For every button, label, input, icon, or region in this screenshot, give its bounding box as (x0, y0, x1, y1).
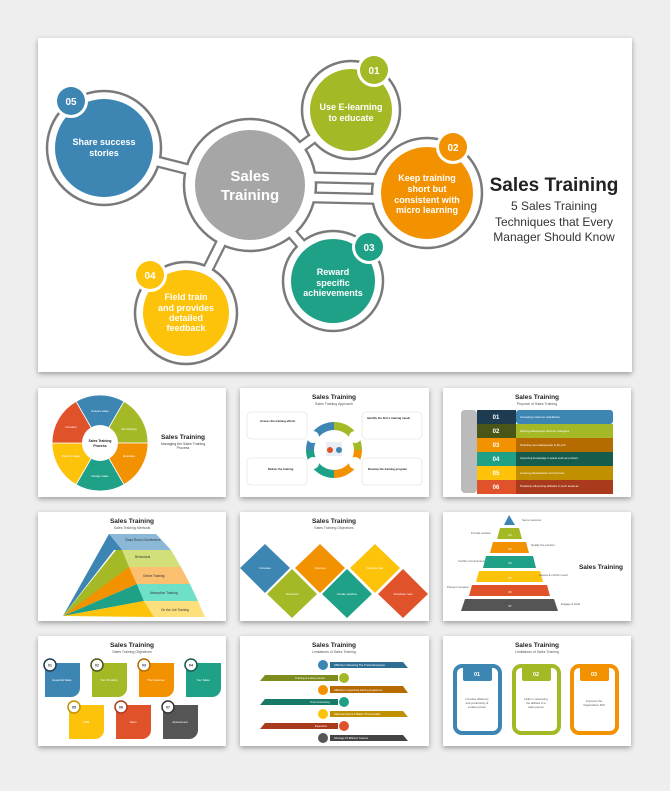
thumb 6: stacked pyramid (443, 512, 631, 621)
center hub: Training (221, 187, 279, 204)
thumb 7: objective cards (38, 636, 226, 746)
thumb 2: approach ring (240, 388, 429, 497)
thumb 9: three frames (443, 636, 631, 746)
thumb 2: approach ring: Deliver the training (268, 467, 294, 471)
center hub (195, 130, 305, 240)
thumb 9: three frames: the abilities of a (526, 701, 546, 705)
thumb 7: objective cards: 03 (142, 664, 146, 668)
title block: 5 Sales Training (511, 199, 597, 213)
title block (490, 175, 618, 244)
node 04: detailed (169, 313, 203, 323)
node 04: and provides (158, 303, 214, 313)
thumb 3: purpose table: 02 (493, 429, 500, 435)
thumb 7: objective cards: 02 (95, 664, 99, 668)
thumb 1: process wheel: Conduct (65, 425, 77, 429)
thumb 3: purpose table: Lowering absenteeism and turnover. (520, 471, 565, 475)
thumb 9: three frames: and productivity of (466, 701, 489, 705)
thumb 6: stacked pyramid: Confirm Commitment (458, 559, 485, 563)
thumb 5: objectives diamonds: Reduce role (367, 566, 383, 570)
thumb 7: objective cards: Sales Training Objectives (112, 650, 152, 654)
thumb 5: objectives diamonds (240, 512, 429, 621)
node 04 (133, 258, 229, 356)
thumb 1: process wheel: Design sales (91, 474, 109, 478)
thumb 7: objective cards: 06 (119, 706, 123, 710)
node 05: 05 (65, 97, 77, 108)
thumb 6: stacked pyramid: Engage & build (561, 602, 580, 606)
thumb 7: objective cards: CRM (83, 720, 90, 724)
thumb 2: approach ring: Identify the firm's training needs (367, 416, 411, 420)
thumb 7: objective cards: Assessment (172, 720, 188, 724)
thumb 6: stacked pyramid: Assess & confirm need (539, 573, 568, 577)
thumb 1: process wheel: Process (177, 446, 190, 450)
thumb 5: objectives diamonds: Create positive (337, 592, 357, 596)
thumb 8: limitations ribbons: Difficulty in organizing training programme (334, 688, 383, 692)
node 05: stories (89, 148, 119, 158)
thumb 8: limitations ribbons: Salesmanship Is A Matter Of Personality (334, 712, 381, 716)
thumb 3: purpose table: Sales Training (515, 394, 559, 401)
thumb 9: three frames: sales person (528, 705, 544, 709)
thumb 5: objectives diamonds: Introduce new (394, 592, 413, 596)
main slide (38, 38, 632, 372)
thumb 6: stacked pyramid: 02 (508, 533, 512, 537)
center hub: Sales (230, 168, 270, 185)
thumb 6: stacked pyramid: 07 (508, 604, 512, 608)
node 02: Keep training (398, 173, 456, 183)
thumb 9: three frames: a sales person (468, 705, 487, 709)
thumb 5: objectives diamonds: Increase (259, 566, 271, 570)
node 03: 03 (363, 243, 375, 254)
node 01: to educate (328, 113, 374, 123)
thumb 1: process wheel: Set training (121, 427, 137, 431)
thumb 9: three frames: Organization ROI (583, 703, 605, 707)
node 03: specific (316, 278, 350, 288)
thumb 8: limitations ribbons: Limitations of Sales Training (312, 650, 356, 654)
thumb 1: process wheel: Assess sales (91, 409, 109, 413)
thumb 7: objective cards: 07 (166, 706, 170, 710)
node 02 (381, 130, 473, 239)
thumb 3: purpose table: Purpose of Sales Training (517, 402, 557, 406)
thumb 3: purpose table: 01 (493, 415, 500, 421)
thumb 3: purpose table (443, 388, 631, 497)
thumb 8: limitations ribbons: Sales Training (312, 642, 356, 649)
thumb 9: three frames: 02 (533, 672, 539, 678)
thumb 1: process wheel: Perform sales (62, 454, 81, 458)
thumb 4: methods fan pyramid: Absorption Training (150, 591, 178, 595)
thumb 6: stacked pyramid: Provide solution (471, 531, 491, 535)
thumb 1: process wheel: Evaluate (123, 454, 135, 458)
thumb 2: approach ring: Sales Training (312, 394, 356, 401)
thumb 4: methods fan pyramid (38, 512, 226, 621)
node 04: feedback (166, 323, 206, 333)
thumb 6: stacked pyramid: 06 (508, 590, 512, 594)
thumb 9: three frames: Sales Training (515, 642, 559, 649)
thumb 9: three frames: Limitations of Sales Training (515, 650, 559, 654)
thumb 7: objective cards: Your Products (100, 678, 118, 682)
node 05: Share success (72, 137, 136, 147)
thumb 6: stacked pyramid: Quality the product (531, 543, 555, 547)
thumb 7: objective cards: Your Sales (196, 678, 210, 682)
thumb 8: limitations ribbons: Training is a slow process (295, 676, 325, 680)
thumb 7: objective cards: 01 (48, 664, 52, 668)
node 02: short but (408, 184, 446, 194)
node 01: Use E-learning (319, 102, 383, 112)
thumb 3: purpose table: Orienting new salespeople to the job. (520, 443, 566, 447)
node 01 (310, 53, 392, 151)
thumb 3: purpose table: 04 (493, 457, 500, 463)
thumb 6: stacked pyramid: Sales Training (579, 564, 623, 571)
thumb 6: stacked pyramid: 04 (508, 561, 512, 565)
thumb 6: stacked pyramid: Serve customer (522, 518, 542, 522)
thumb 2: approach ring: Sales Training Approach (315, 402, 353, 406)
node 02: 02 (447, 143, 459, 154)
thumb 8: limitations ribbons: Shortage Of Efficient Trainers (334, 736, 369, 740)
thumb 3: purpose table: Improving knowledge in areas such as product, (520, 456, 579, 460)
node 04: Field train (164, 292, 208, 302)
thumb 4: methods fan pyramid: On the Job Training (161, 608, 189, 612)
thumb 3: purpose table: Helping salespeople become managers. (520, 429, 570, 433)
thumb 8: limitations ribbons: Expensive (315, 724, 328, 728)
thumb 7: objective cards: The Customer (147, 678, 165, 682)
thumb 7: objective cards: Sales Training (110, 642, 154, 649)
connectors (104, 110, 427, 313)
thumb 3: purpose table: Positively influencing attitudes in such areas as (520, 484, 579, 488)
thumb 1: process wheel: Sales Training (161, 434, 205, 441)
thumb 2: approach ring: Develop the training program (368, 467, 408, 471)
title block: Sales Training (490, 175, 618, 196)
thumb 2: approach ring: Assess the training efforts (260, 419, 296, 423)
thumb 4: methods fan pyramid: Behavioral (135, 555, 150, 559)
thumb 9: three frames: 01 (474, 672, 480, 678)
thumb 3: purpose table: 06 (493, 485, 500, 491)
thumb 4: methods fan pyramid: Online Training (143, 574, 165, 578)
thumb 1: process wheel: Managing the Sales Training (161, 442, 205, 446)
thumb 8: limitations ribbons (240, 636, 429, 746)
thumb 8: limitations ribbons: Time Consuming (310, 700, 330, 704)
thumb 6: stacked pyramid: 05 (508, 576, 512, 580)
thumb 8: limitations ribbons: Difficulty in Retaining The Trained Employee (334, 663, 385, 667)
thumb 9: three frames: Increase efficiency (465, 697, 489, 701)
thumb 7: objective cards: Essential Sales (52, 678, 72, 682)
node 05 (54, 84, 153, 197)
thumb 6: stacked pyramid: Present company (447, 585, 469, 589)
title block: Manager Should Know (493, 230, 615, 244)
thumb 1: process wheel (38, 388, 226, 497)
node 04: 04 (144, 271, 156, 282)
thumb 3: purpose table: Increasing customer satisfaction. (520, 415, 561, 419)
thumb 7: objective cards: Team (130, 720, 137, 724)
node 02: micro learning (396, 205, 458, 215)
node 03: achievements (303, 288, 363, 298)
thumb 5: objectives diamonds: Sales Training Objectives (314, 526, 354, 530)
title block: Techniques that Every (495, 215, 613, 229)
thumb 5: objectives diamonds: Sales Training (312, 518, 356, 525)
thumb 4: methods fan pyramid: Sales Training Methods (114, 526, 151, 530)
thumb 9: three frames: 03 (591, 672, 597, 678)
node 03: Reward (317, 267, 349, 277)
thumb 5: objectives diamonds: Improve (315, 566, 326, 570)
thumb 1: process wheel: Sales Training (88, 439, 112, 443)
thumb 4: methods fan pyramid: Class Room /Conference (125, 538, 161, 542)
thumb 7: objective cards: 04 (189, 664, 193, 668)
thumb 4: methods fan pyramid: Sales Training (110, 518, 154, 525)
thumb 9: three frames: Helps in accessing (524, 697, 548, 701)
thumb 5: objectives diamonds: Improved (286, 592, 299, 596)
thumb 3: purpose table: 03 (493, 443, 500, 449)
node 02: consistent with (394, 195, 460, 205)
thumb 3: purpose table: 05 (493, 471, 500, 477)
node 01: 01 (368, 66, 380, 77)
thumb 9: three frames: Improves the (586, 699, 603, 703)
thumb 6: stacked pyramid: 03 (508, 547, 512, 551)
thumb 1: process wheel: Process (93, 444, 107, 448)
node 03 (291, 230, 386, 323)
thumb 7: objective cards: 05 (72, 706, 76, 710)
